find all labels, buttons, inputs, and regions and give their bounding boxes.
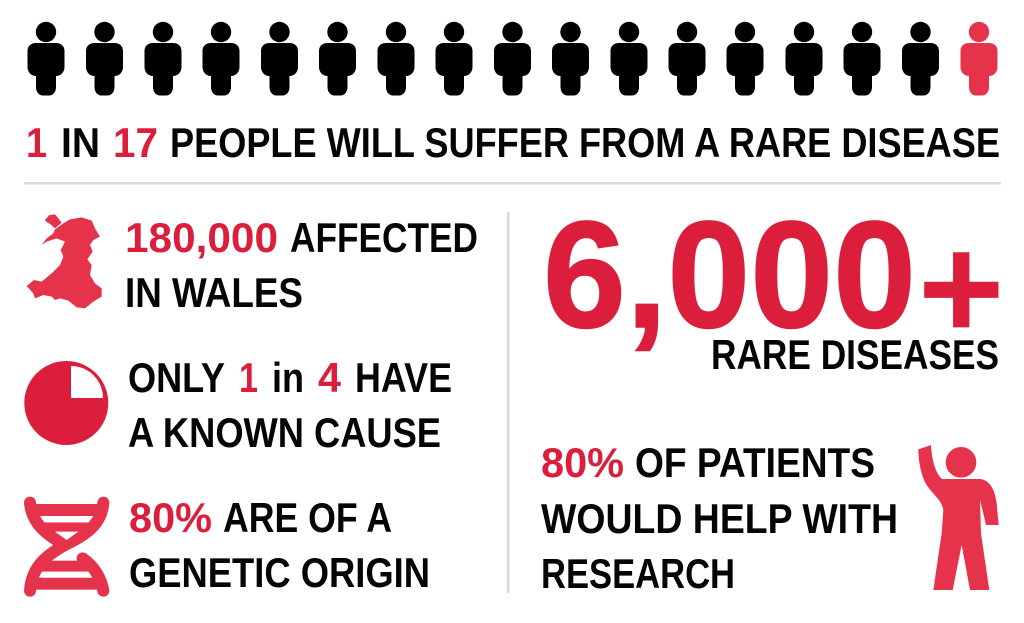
text: only 1 in 4 have a known cause: ONLY (128, 354, 225, 401)
people row: 1 in 17 (28, 22, 998, 95)
text: 80% are of a genetic origin: 80% (129, 494, 212, 541)
big number: 6,000+: 6,000 (543, 190, 916, 360)
text: 80% of patients would help with research (541, 439, 898, 597)
big number: 6,000+: + (918, 206, 1004, 371)
text: 80% are of a genetic origin (129, 494, 430, 596)
text: only 1 in 4 have a known cause: A KNOWN CAUSE (128, 409, 441, 456)
text: only 1 in 4 have a known cause: 1 (239, 354, 258, 401)
text: 80% of patients would help with research: OF PATIENTS (635, 439, 875, 486)
text: 80% of patients would help with research: 80% (541, 439, 624, 486)
text: only 1 in 4 have a known cause: in (272, 354, 304, 401)
text: 180,000 affected in Wales: 180,000 (125, 214, 278, 261)
text: 180,000 affected in Wales: IN WALES (125, 269, 303, 316)
icon: pie chart one quarter (24, 361, 108, 445)
text: only 1 in 4 have a known cause: HAVE (355, 354, 452, 401)
icon: person raising hand (918, 445, 999, 590)
text: 80% of patients would help with research: WOULD HELP WITH (541, 495, 898, 542)
text: only 1 in 4 have a known cause (128, 354, 452, 456)
headline: 1 in 17 people: 17 (113, 119, 158, 166)
text: 80% are of a genetic origin: GENETIC ORIGIN (129, 549, 430, 596)
icon: DNA helix (30, 503, 103, 591)
text: only 1 in 4 have a known cause: 4 (318, 354, 342, 401)
text: 80% are of a genetic origin: ARE OF A (223, 494, 392, 541)
icon: map of Wales (27, 214, 102, 308)
headline: 1 in 17 people: IN (61, 119, 100, 166)
text: 180,000 affected in Wales (125, 214, 478, 316)
text: 180,000 affected in Wales: AFFECTED (290, 214, 478, 261)
text: 80% of patients would help with research: RESEARCH (541, 550, 735, 597)
headline: 1 in 17 people: 1 (26, 119, 47, 166)
